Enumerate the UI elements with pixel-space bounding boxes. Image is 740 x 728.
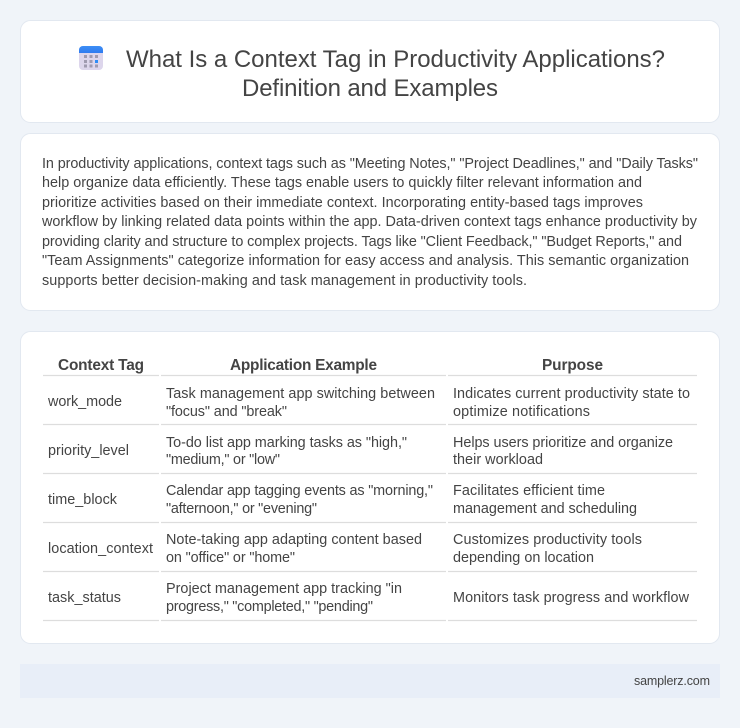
- table row: time_block: Calendar app tagging events as "morning,": [166, 483, 433, 499]
- text block: introduction paragraph: [41, 156, 698, 289]
- table row: priority_level: To-do list app marking tasks as "high,": [166, 435, 407, 451]
- title: What Is a Context Tag in Productivity Applications?: [126, 46, 665, 73]
- table row: priority_level: "medium," or "low": [166, 452, 280, 468]
- text block: introduction paragraph: help organize data efficiently. These tags enable users to quickly filter relevant information and: [42, 175, 642, 191]
- table row: task_status: [48, 581, 690, 615]
- table header: Context Tag: [58, 357, 144, 374]
- table header: Purpose: [542, 357, 603, 374]
- table row: location_context: location_context: [48, 541, 153, 557]
- table row: task_status: Monitors task progress and workflow: [453, 590, 690, 606]
- table row: location_context: [48, 532, 642, 566]
- text block: introduction paragraph: workflow by linking related data points within the app. Data-driven context tags enhance productivity by: [41, 214, 698, 230]
- table row: location_context: Note-taking app adapting content based: [166, 532, 422, 548]
- table row: work_mode: "focus" and "break": [166, 404, 287, 420]
- table row: priority_level: priority_level: [48, 443, 129, 459]
- table row: task_status: Project management app tracking "in: [166, 581, 402, 597]
- table row: priority_level: their workload: [453, 452, 543, 468]
- title: Definition and Examples: [242, 75, 498, 102]
- footer bar: [20, 664, 720, 698]
- table row: time_block: management and scheduling: [453, 501, 637, 517]
- title: [126, 46, 665, 102]
- text block: introduction paragraph: "Team Assignments" categorize information for easy access and analysis. This semantic organization: [42, 253, 689, 269]
- table row: time_block: time_block: [48, 492, 118, 508]
- table row: location_context: on "office" or "home": [166, 550, 295, 566]
- table row: task_status: task_status: [48, 590, 121, 606]
- text block: introduction paragraph: supports better decision-making and task management in productivity tools.: [42, 273, 527, 289]
- table row: task_status: progress," "completed," "pending": [166, 599, 373, 615]
- panel: title card: [20, 20, 720, 122]
- table row: priority_level: [48, 435, 673, 468]
- table row: work_mode: Task management app switching between: [166, 386, 435, 402]
- table row: work_mode: Indicates current productivity state to: [453, 386, 690, 402]
- table row: time_block: "afternoon," or "evening": [166, 501, 317, 517]
- table row: priority_level: Helps users prioritize and organize: [453, 435, 673, 451]
- panel: introduction: [20, 134, 720, 310]
- panel: context tag table: [20, 332, 720, 644]
- text block: introduction paragraph: prioritize activities based on their immediate context. Incorporating entity-based tags improves: [42, 195, 643, 211]
- table row: time_block: [48, 483, 637, 517]
- icon: calendar: [79, 46, 103, 70]
- text block: introduction paragraph: In productivity applications, context tags such as "Meeting Notes," "Project Deadlines," and "Daily Tasks": [42, 156, 698, 172]
- table row: work_mode: [47, 386, 690, 420]
- table row: work_mode: optimize notifications: [453, 404, 590, 420]
- table header: Application Example: [230, 357, 377, 374]
- footer source text: samplerz.com: [634, 674, 710, 688]
- table row: work_mode: work_mode: [47, 394, 122, 410]
- table row: location_context: depending on location: [453, 550, 594, 566]
- table row: location_context: Customizes productivity tools: [453, 532, 642, 548]
- table header: [58, 357, 603, 374]
- text block: introduction paragraph: providing clarity and structure to complex projects. Tags like "Client Feedback," "Budget Reports," and: [42, 234, 682, 250]
- table row: time_block: Facilitates efficient time: [453, 483, 605, 499]
